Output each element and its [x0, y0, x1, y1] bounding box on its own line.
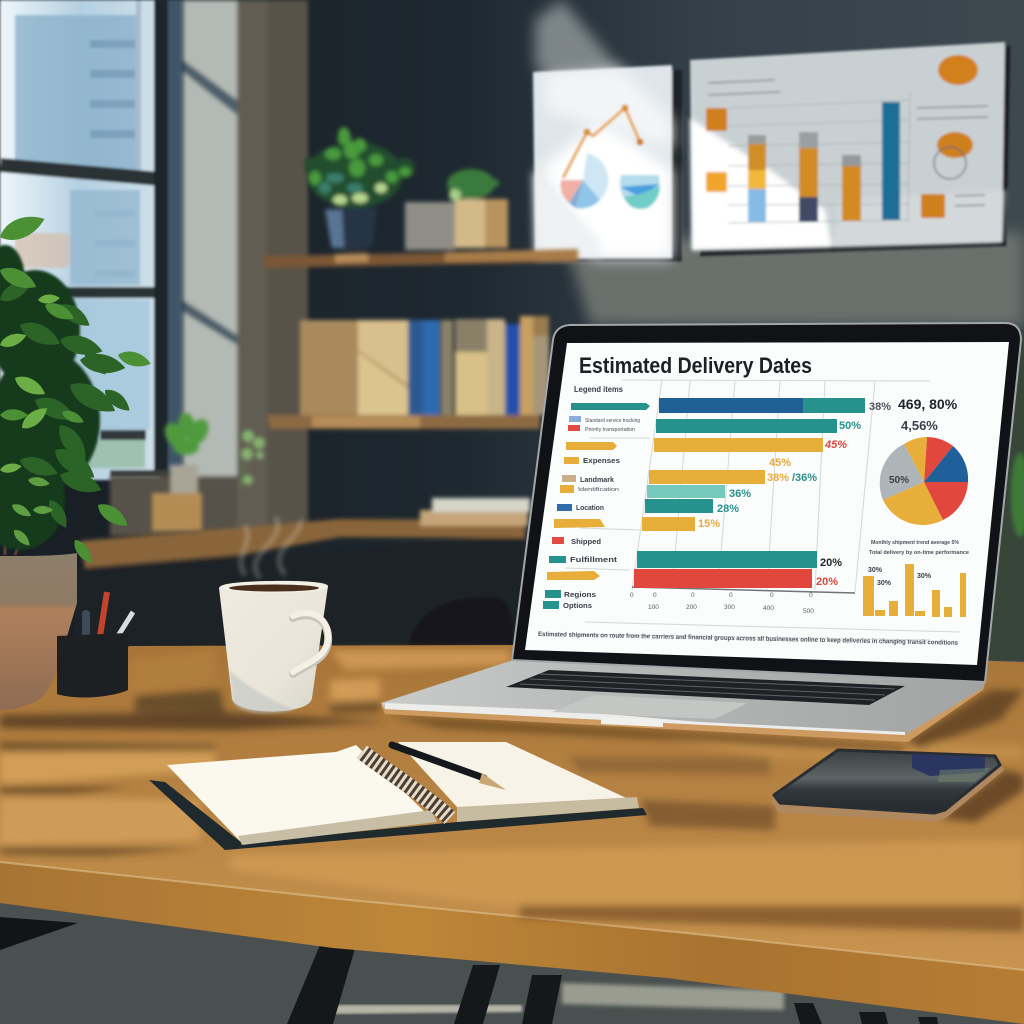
- axis tick labels: [630, 592, 814, 615]
- potted plant on upper shelf: [304, 127, 415, 250]
- bar value labels: /36%: [792, 472, 817, 484]
- wall poster: line chart and pies: [533, 65, 682, 262]
- table edge: [0, 862, 1024, 1024]
- bar value labels: 50%: [839, 420, 861, 432]
- smartphone: [772, 750, 1002, 820]
- legend column: Landmark: [580, 477, 614, 484]
- axis tick labels: 500: [803, 608, 814, 615]
- laptop base and keyboard: [381, 660, 986, 742]
- window sill plants and box: [152, 413, 265, 531]
- notebook with pen: [149, 742, 647, 850]
- small bar chart: Monthly shipment trend average 5%: [871, 540, 959, 546]
- legend column: Standard service tracking: [585, 418, 640, 424]
- laptop lid bezel: [512, 323, 1021, 682]
- terracotta pot: [0, 553, 77, 710]
- bar value labels: 36%: [729, 488, 751, 500]
- axis tick labels: 200: [686, 604, 697, 611]
- row of books: [300, 316, 549, 415]
- legend column: Legend items: [574, 385, 624, 394]
- axis tick labels: 0: [630, 592, 634, 599]
- small bar chart: Total delivery by on-time performance: [869, 550, 969, 556]
- bar value labels: 45%: [824, 439, 847, 451]
- small bar chart: [863, 540, 969, 617]
- sunlit streaks: [0, 752, 215, 785]
- wall poster: stacked bar chart: [690, 42, 1010, 256]
- legend column: Location: [576, 505, 604, 512]
- shelf: lower: [267, 415, 540, 429]
- pencil cup: [57, 592, 133, 697]
- legend column: [543, 385, 650, 610]
- bar value labels: 28%: [717, 503, 739, 515]
- spiral binding: [362, 752, 450, 818]
- bar value labels: [698, 401, 891, 588]
- bar value labels: 38%: [869, 401, 891, 413]
- gridlines and axis: [565, 380, 960, 640]
- pie chart summary: [880, 396, 968, 525]
- background wall: [0, 0, 1024, 700]
- legend column: Identification: [578, 487, 619, 493]
- legend column: Shipped: [571, 537, 601, 546]
- small bar chart: 30%: [868, 567, 883, 574]
- legend column: Fulfillment: [570, 555, 618, 564]
- legend column: Priority transportation: [585, 427, 635, 433]
- axis tick labels: 0: [653, 592, 657, 599]
- leaf shadows: [135, 690, 225, 712]
- bar value labels: 45%: [769, 457, 791, 469]
- pie chart summary: 4,56%: [901, 418, 938, 433]
- mug handle: [293, 613, 328, 674]
- axis tick labels: 300: [724, 604, 735, 611]
- pie chart summary: 50%: [889, 475, 909, 486]
- small bar chart: 30%: [917, 573, 932, 580]
- table legs: [287, 945, 938, 1024]
- axis tick labels: 0: [809, 592, 813, 599]
- window with city view: [0, 0, 185, 480]
- bar value labels: 38%: [767, 472, 789, 484]
- shelf: upper: [262, 249, 578, 268]
- dashboard title: Estimated Delivery Dates: [579, 353, 812, 378]
- bar value labels: 20%: [816, 576, 838, 588]
- wall shelves with plant, boxes and books: [262, 127, 578, 429]
- potted plant: [0, 210, 153, 710]
- footnote text: Estimated shipments on route from the carriers and financial groups across all businesses online to keep deliveries in changing transit conditions: [538, 631, 958, 647]
- pen: [392, 745, 506, 790]
- table: [0, 645, 1024, 1024]
- back counter with stacked books: [75, 498, 530, 665]
- table top: [0, 645, 1024, 970]
- axis tick labels: 0: [691, 592, 695, 599]
- laptop screen: [525, 342, 1009, 665]
- legend column: Expenses: [583, 456, 620, 465]
- axis tick labels: 100: [648, 604, 659, 611]
- bar value labels: 20%: [820, 557, 842, 569]
- axis tick labels: 400: [763, 605, 774, 612]
- legend column: Regions: [564, 592, 596, 599]
- small bar chart: 30%: [877, 580, 892, 587]
- legend column: Options: [563, 603, 592, 610]
- main horizontal bar chart: [634, 398, 865, 588]
- axis tick labels: 0: [770, 592, 774, 599]
- axis tick labels: 0: [729, 592, 733, 599]
- pie chart summary: 469, 80%: [898, 396, 958, 412]
- laptop: [381, 323, 1021, 742]
- concrete pillar with sun patches: [110, 0, 308, 536]
- boxes and small plant: [405, 169, 508, 250]
- coffee mug with steam: [219, 517, 328, 714]
- bar value labels: 15%: [698, 518, 720, 530]
